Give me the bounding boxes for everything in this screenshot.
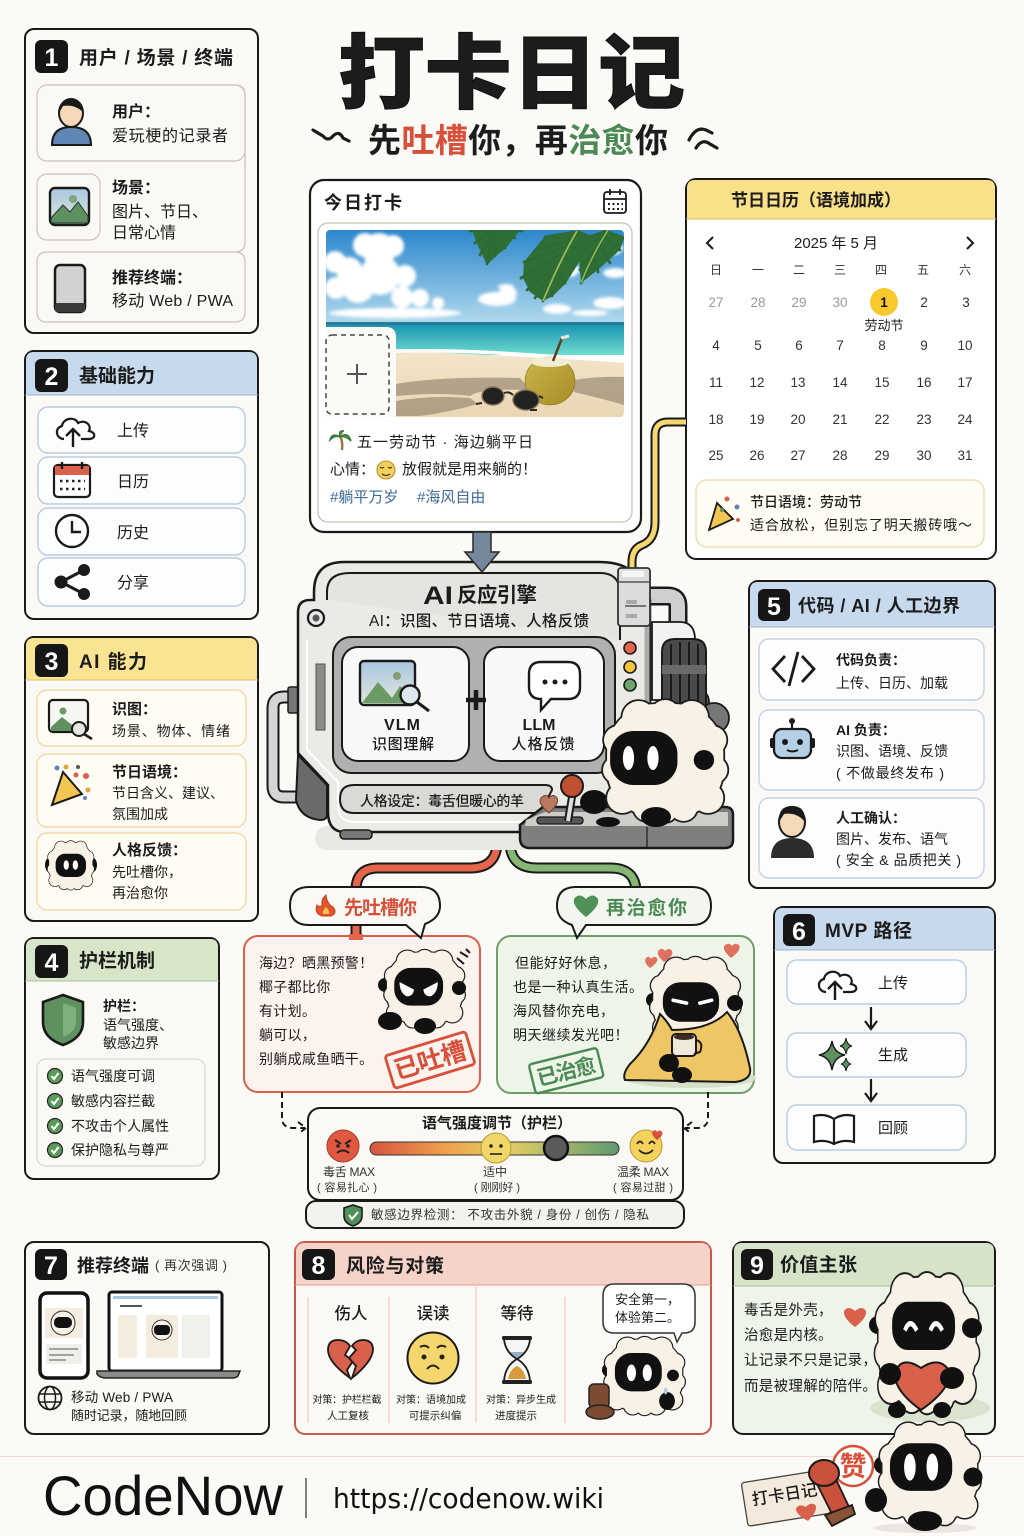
badge 6 (783, 914, 815, 946)
sensitive boundary bar: 敏感边界检测： 不攻击外貌 / 身份 / 创伤 / 隐私 (371, 1207, 649, 1222)
heal text: 但能好好休息， (515, 955, 616, 971)
row: user: 爱玩梗的记录者 (112, 127, 228, 145)
gauge labels: 温柔 MAX (617, 1165, 669, 1179)
persona pill: 人格设定：毒舌但暖心的羊 (360, 793, 524, 809)
month nav (707, 235, 973, 252)
gauge labels (317, 1164, 673, 1194)
badge 5 (758, 589, 790, 621)
row: image recognition: 识图： (112, 701, 157, 718)
footer: ticket and stamp (741, 1446, 873, 1530)
caption: mood (330, 461, 537, 479)
value text (744, 1302, 877, 1395)
badge 6: 6 (792, 918, 806, 946)
row: code (759, 639, 984, 700)
row: code: 上传、日历、加载 (836, 675, 948, 691)
row: human: ( 安全 & 品质把关 ) (836, 852, 961, 868)
sunglasses (476, 387, 543, 410)
calendar grid: 17 (957, 375, 973, 390)
row: user: 用户： (112, 102, 160, 121)
row: device (55, 265, 233, 312)
row: upload: 上传 (117, 422, 149, 440)
hearts (645, 944, 740, 968)
icon: calendar (604, 189, 626, 213)
calendar grid: 10 (957, 338, 973, 353)
module: LLM (484, 647, 604, 761)
heading: engine: AI (423, 582, 453, 610)
row: device: 推荐终端： (112, 269, 192, 287)
dashed arrow: roast to tone (282, 1092, 306, 1134)
calendar grid: 13 (790, 375, 806, 390)
pipe: engine to roast (356, 826, 497, 942)
heart knob (540, 796, 558, 813)
row: scene: 图片、节日、 (112, 203, 208, 221)
calendar grid: 12 (749, 375, 765, 390)
checklist: 不攻击个人属性 (71, 1118, 169, 1134)
guardrail icon and text: 护栏： (103, 998, 145, 1014)
row: history: 历史 (117, 524, 149, 542)
badge 1: 1 (45, 44, 59, 72)
panel 5: code / AI / human boundaries (749, 581, 995, 888)
checklist: 语气强度可调 (71, 1068, 155, 1084)
plus (466, 690, 486, 710)
footer: sheep (865, 1422, 982, 1533)
persona pill (340, 785, 552, 813)
heal text: 明天继续发光吧！ (513, 1027, 629, 1043)
speech bubble: safety: 体验第二。 (615, 1310, 680, 1325)
row: persona feedback: 先吐槽你， (112, 864, 182, 880)
panel 7: recommended device (25, 1242, 269, 1434)
gauge labels: 适中 (483, 1164, 507, 1179)
value text: 让记录不只是记录， (744, 1352, 877, 1369)
holiday note (696, 480, 984, 547)
row: device: 移动 Web / PWA (112, 292, 233, 310)
guardrail icon and text (43, 995, 173, 1051)
row: share: 分享 (117, 574, 149, 592)
row: AI: 识图、语境、反馈 (836, 743, 948, 759)
calendar grid: 29 (791, 295, 807, 310)
arrow: check-in to engine (465, 532, 499, 572)
row: calendar: 日历 (117, 474, 149, 491)
heading 7: 推荐终端 (77, 1256, 149, 1276)
subtitle: 先吐槽你，再治愈你 (368, 122, 668, 159)
badge 3 (35, 644, 68, 677)
calendar grid: 20 (790, 412, 806, 427)
calendar grid: 8 (878, 338, 886, 353)
panel 4: guardrails (25, 938, 219, 1179)
title: 打卡日记 (338, 30, 685, 120)
calendar grid: 28 (750, 295, 766, 310)
calendar grid: 15 (874, 375, 890, 390)
coconut (525, 336, 575, 405)
badge 2: 2 (45, 363, 58, 391)
calendar grid: 1 (880, 295, 888, 310)
badge 4: 4 (45, 949, 59, 977)
roast text (259, 955, 373, 1067)
footer: url: https://codenow.wiki (333, 1482, 604, 1515)
engine subtitle: AI：识图、节日语境、人格反馈 (369, 611, 589, 630)
calendar grid: 23 (916, 412, 932, 427)
speech bubble: safety: 安全第一， (615, 1292, 680, 1307)
card: heal (497, 936, 756, 1094)
globe and caption: 移动 Web / PWA (71, 1390, 173, 1405)
arrow (865, 1079, 877, 1101)
badge 9 (741, 1249, 773, 1280)
console (520, 807, 733, 848)
cable block (662, 639, 729, 733)
add photo button (326, 327, 396, 417)
heading 6: MVP 路径 (825, 920, 912, 942)
risk: misread (396, 1304, 466, 1422)
panel: today check-in card (310, 180, 641, 532)
praise stamp: 赞 (840, 1452, 866, 1482)
stamper (809, 1460, 855, 1526)
beach photo (324, 229, 627, 417)
heal text: 也是一种认真生活。 (513, 979, 644, 995)
calendar grid: 一 (752, 263, 764, 277)
calendar grid: 14 (832, 375, 848, 390)
calendar grid: 7 (836, 338, 844, 353)
calendar grid: 6 (795, 338, 803, 353)
healing sheep with blanket (624, 957, 756, 1088)
calendar grid: 19 (749, 412, 765, 427)
bubble: roast (290, 887, 440, 938)
row: persona feedback: 人格反馈： (112, 841, 187, 859)
calendar grid: 29 (874, 448, 890, 463)
status lights (624, 642, 636, 691)
risk: hurt (312, 1304, 382, 1422)
hashtags (330, 489, 485, 506)
heading: calendar: 节日日历（语境加成） (731, 190, 901, 210)
calendar grid: 30 (916, 448, 932, 463)
panel 1: users, scenes, devices (25, 29, 258, 333)
roast sheep (378, 950, 466, 1034)
holiday note: 适合放松，但别忘了明天搬砖哦～ (750, 517, 972, 533)
caption: mood: 心情： (330, 461, 375, 478)
footer: brand: CodeNow (43, 1464, 284, 1527)
row: persona feedback: 再治愈你 (112, 885, 168, 901)
step: upload (787, 960, 966, 1004)
row: image recognition: 场景、物体、情绪 (112, 723, 230, 739)
heading 3: AI 能力 (79, 651, 147, 673)
calendar grid: 26 (749, 448, 765, 463)
calendar grid: 5 (754, 338, 762, 353)
panel 6: MVP path (774, 907, 995, 1163)
risk: hurt: 人工复核 (327, 1409, 369, 1422)
risk: misread: 误读 (416, 1304, 450, 1323)
badge 1 (35, 40, 68, 73)
arrow (865, 1007, 877, 1029)
guardrail icon and text: 语气强度、 (103, 1017, 173, 1033)
laptop mockup (97, 1292, 240, 1378)
caption: mood: 放假就是用来躺的！ (402, 461, 537, 478)
step: generate: 生成 (878, 1047, 908, 1064)
badge 9: 9 (750, 1252, 764, 1280)
module: VLM: VLM (384, 717, 420, 734)
row: human (759, 798, 984, 878)
row: holiday context (37, 754, 246, 827)
badge 7: 7 (44, 1252, 58, 1280)
row: human: 人工确认： (836, 810, 906, 826)
AI engine machine (273, 562, 735, 850)
roast text: 海边？晒黑预警！ (259, 955, 373, 971)
row: scene (37, 174, 208, 242)
stamp: healed (529, 1048, 604, 1094)
badge 4 (35, 945, 68, 978)
value text: 毒舌是外壳， (744, 1302, 833, 1319)
row: user (37, 85, 245, 322)
row: history (38, 508, 245, 555)
calendar grid: 16 (916, 375, 932, 390)
sheep holding heart (869, 1273, 990, 1422)
heading 5: 代码 / AI / 人工边界 (798, 596, 960, 616)
panel: holiday calendar (686, 179, 996, 559)
value text: 治愈是内核。 (744, 1327, 833, 1344)
face: gentle (630, 1130, 662, 1162)
heading: today: 今日打卡 (324, 192, 402, 213)
heading 8: 风险与对策 (346, 1254, 444, 1277)
calendar grid: 30 (832, 295, 848, 310)
bubble: roast: 先吐槽你 (344, 897, 417, 919)
module: LLM: 人格反馈 (512, 736, 574, 753)
bubble: heal: 再治愈你 (606, 896, 687, 919)
calendar grid: 四 (875, 263, 887, 277)
module frame (333, 637, 615, 773)
right pipes (648, 596, 678, 626)
calendar grid: 28 (832, 448, 848, 463)
row: holiday context: 节日语境： (112, 763, 187, 781)
calendar grid: 31 (957, 448, 973, 463)
calendar grid: 二 (793, 263, 805, 277)
joystick (561, 775, 583, 821)
sensitive boundary bar (306, 1201, 684, 1228)
row: holiday context: 节日含义、建议、 (112, 785, 224, 801)
calendar grid: 27 (790, 448, 806, 463)
calendar grid: 25 (708, 448, 724, 463)
calendar grid: 五 (917, 263, 929, 277)
hashtags: #躺平万岁 (330, 489, 398, 506)
clouds (324, 233, 627, 318)
heading 7: ( 再次强调 ) (155, 1258, 227, 1273)
calendar grid: 27 (708, 295, 724, 310)
left pipe (273, 697, 305, 797)
calendar grid: 2 (920, 295, 928, 310)
row: AI (759, 710, 984, 790)
pipe: calendar to engine (632, 422, 686, 572)
calendar grid: 18 (708, 412, 724, 427)
stamp: healed: 已治愈 (534, 1053, 598, 1091)
badge 8 (302, 1249, 335, 1280)
calendar grid: 劳动节 (864, 318, 904, 333)
calendar grid: 21 (832, 412, 848, 427)
badge 5: 5 (767, 593, 781, 621)
sheep at control console (520, 700, 733, 848)
calendar grid: 11 (709, 375, 723, 390)
row: human: 图片、发布、语气 (836, 831, 948, 847)
chassis (296, 755, 327, 820)
risk: hurt: 对策：护栏栏截 (312, 1393, 382, 1406)
row: persona feedback (37, 833, 246, 910)
calendar grid: 六 (959, 263, 971, 277)
calendar grid: 22 (874, 412, 890, 427)
risk: misread: 对策：语境加成 (396, 1393, 466, 1406)
checklist: 敏感内容拦截 (71, 1093, 155, 1109)
card: roast (244, 936, 480, 1092)
checklist: 保护隐私与尊严 (71, 1142, 169, 1158)
footer: ticket and stamp: 打卡日记 (751, 1480, 819, 1509)
guardrail icon and text: 敏感边界 (103, 1035, 159, 1051)
panel 3: AI abilities (25, 637, 258, 921)
panel 9: value proposition (733, 1242, 995, 1434)
palm fronds (472, 230, 624, 301)
value text: 而是被理解的陪伴。 (744, 1378, 877, 1395)
module: LLM: LLM (522, 717, 556, 734)
bubble: heal (557, 887, 711, 938)
row: scene: 场景： (112, 179, 160, 197)
heading 1: 用户 / 场景 / 终端 (79, 46, 233, 69)
calendar grid (708, 263, 973, 463)
checklist (37, 1059, 205, 1166)
row: calendar (38, 457, 245, 504)
face: neutral (481, 1133, 511, 1163)
roast text: 椰子都比你 (259, 979, 330, 995)
heading 2: 基础能力 (79, 365, 155, 387)
risk: waiting: 进度提示 (495, 1409, 537, 1422)
calendar grid: 3 (962, 295, 970, 310)
globe and caption: 随时记录，随地回顾 (71, 1408, 187, 1423)
risk: waiting: 等待 (500, 1304, 534, 1323)
badge 2 (35, 359, 68, 392)
heading 7 (77, 1256, 227, 1276)
panel 2: basic abilities (25, 351, 258, 619)
phone mockup (40, 1293, 88, 1378)
module: VLM (342, 647, 469, 761)
panel 8: risks and countermeasures (295, 1242, 711, 1434)
step: upload: 上传 (878, 975, 908, 992)
row: AI: AI 负责： (836, 722, 896, 738)
gauge title: 语气强度调节（护栏） (422, 1114, 572, 1132)
row: share (38, 558, 245, 606)
calendar grid: 4 (712, 338, 720, 353)
hashtags: #海风自由 (417, 489, 485, 506)
gauge labels: 毒舌 MAX (323, 1165, 375, 1179)
sheep body (603, 700, 727, 822)
risk: misread: 可提示纠偏 (409, 1409, 461, 1422)
calendar grid: 24 (957, 412, 973, 427)
row: AI: ( 不做最终发布 ) (836, 765, 944, 781)
month nav: 2025 年 5 月 (794, 235, 878, 252)
sheep with gavel (586, 1337, 685, 1419)
globe and caption (38, 1386, 187, 1423)
row: image recognition (37, 690, 246, 746)
module: VLM: 识图理解 (372, 736, 434, 753)
palm shadow (396, 377, 624, 416)
heading 4: 护栏机制 (79, 950, 155, 972)
calendar grid: 9 (920, 338, 928, 353)
gauge labels: ( 容易过甜 ) (613, 1180, 673, 1194)
badge 8: 8 (312, 1252, 326, 1280)
calendar grid: 三 (834, 263, 846, 277)
stamp: roasted: 已吐槽 (391, 1037, 470, 1085)
heal text: 海风替你充电， (513, 1003, 614, 1019)
dashed arrow: heal to tone (684, 1092, 708, 1134)
tone intensity gauge (308, 1108, 683, 1200)
step: review (787, 1105, 966, 1150)
gauge labels: ( 容易扎心 ) (317, 1180, 377, 1194)
step: generate (787, 1033, 966, 1077)
row: holiday context: 氛围加成 (112, 806, 168, 822)
small heart (844, 1308, 866, 1327)
risk: waiting: 对策：异步生成 (486, 1393, 556, 1406)
row: scene: 日常心情 (112, 224, 176, 242)
right connector (618, 568, 650, 626)
speech bubble: safety (603, 1284, 695, 1342)
roast text: 别躺成咸鱼晒干。 (259, 1051, 373, 1067)
pipe: engine to heal (510, 826, 636, 892)
heading 9: 价值主张 (780, 1254, 857, 1276)
roast text: 躺可以， (259, 1027, 316, 1043)
slider (370, 1136, 619, 1160)
step: review: 回顾 (878, 1120, 908, 1137)
heading: engine (423, 582, 537, 610)
risk: hurt: 伤人 (334, 1304, 368, 1323)
caption: palm and headline: 五一劳动节 · 海边躺平日 (357, 434, 533, 451)
calendar grid: 日 (710, 263, 722, 277)
row: upload (38, 407, 245, 453)
face: toxic (327, 1130, 359, 1162)
gauge labels: ( 刚刚好 ) (474, 1180, 520, 1194)
holiday note: 节日语境：劳动节 (750, 494, 862, 510)
badge 3: 3 (45, 648, 58, 676)
heading: engine: 反应引擎 (457, 583, 537, 607)
badge 7 (35, 1249, 67, 1280)
roast text: 有计划。 (259, 1003, 316, 1019)
row: code: 代码负责： (836, 652, 906, 668)
risk: waiting (486, 1304, 556, 1422)
heal text (513, 955, 644, 1043)
